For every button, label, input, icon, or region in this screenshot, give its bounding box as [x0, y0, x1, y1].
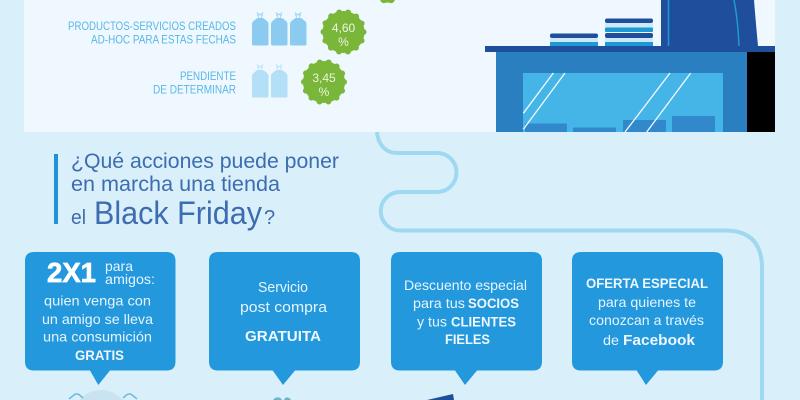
- illustration: shop counter: [485, 0, 775, 132]
- row: products and services created ad hoc: 4,60: [332, 21, 356, 35]
- shopping bag: [661, 0, 758, 46]
- speech bubble: facebook offer: conozcan a través: [589, 312, 704, 328]
- speech bubble: facebook offer: [572, 252, 723, 385]
- speech bubble: post purchase service: [209, 252, 360, 385]
- speech bubble: post purchase service: post compra: [240, 300, 328, 316]
- speech bubble: post purchase service: GRATUITA: [245, 329, 322, 345]
- speech bubble: 2x1: un amigo se lleva: [42, 311, 153, 327]
- folded clothes right: [605, 18, 653, 46]
- panel: survey results: [24, 0, 775, 132]
- speech bubble: special discount: Descuento especial: [404, 277, 527, 293]
- speech bubble: facebook offer: para quienes te: [598, 294, 696, 310]
- speech bubble: special discount: SOCIOS: [468, 295, 519, 311]
- heading: ¿Qué acciones puede poner: [71, 150, 339, 173]
- row: products and services created ad hoc: PRODUCTOS-SERVICIOS CREADOS: [68, 19, 236, 33]
- speech bubble: 2x1: GRATIS: [75, 347, 124, 363]
- speech bubble: special discount: FIELES: [445, 331, 490, 347]
- speech bubble: facebook offer: Facebook: [623, 332, 696, 349]
- shop window: [523, 73, 723, 132]
- speech bubble: 2x1: [25, 252, 176, 385]
- heading: [54, 150, 339, 231]
- heading: el: [71, 207, 86, 229]
- speech bubble: 2x1: para: [105, 258, 133, 274]
- speech bubble: special discount: y tus: [417, 314, 447, 330]
- icon: face with ears, cut off at the bottom: [69, 390, 137, 400]
- speech bubble: 2x1: una consumición: [43, 328, 152, 344]
- heading: ?: [264, 207, 275, 229]
- folded clothes left: [550, 34, 598, 46]
- speech bubble: special discount: [391, 252, 542, 385]
- winding path line: [377, 132, 762, 400]
- speech bubble: special discount: CLIENTES: [451, 314, 516, 330]
- speech bubble: special discount: para tus: [413, 295, 465, 311]
- speech bubble: 2x1: quien venga con: [44, 292, 151, 308]
- speech bubble: facebook offer: de: [603, 332, 619, 348]
- green badge cut off at top: [380, 0, 395, 3]
- speech bubble: facebook offer: OFERTA ESPECIAL: [586, 275, 708, 291]
- speech bubble: 2x1: 2X1: [47, 257, 96, 288]
- heading: en marcha una tienda: [71, 173, 280, 196]
- row: pending to determine: PENDIENTE: [180, 69, 236, 83]
- speech bubble: 2x1: amigos:: [105, 271, 155, 287]
- icon: teal shape, cut off at the bottom: [273, 397, 291, 400]
- row: pending to determine: [153, 61, 345, 103]
- speech bubble: post purchase service: Servicio: [258, 280, 308, 296]
- row: products and services created ad hoc: AD-HOC PARA ESTAS FECHAS: [91, 32, 236, 46]
- row: pending to determine: %: [319, 85, 330, 99]
- icon: dark blue shape, cut off at the bottom: [427, 394, 454, 400]
- row: products and services created ad hoc: %: [338, 35, 349, 49]
- row: products and services created ad hoc: [68, 11, 364, 53]
- heading: Black Friday: [94, 195, 262, 231]
- row: pending to determine: DE DETERMINAR: [153, 82, 236, 96]
- row: pending to determine: 3,45: [312, 71, 336, 85]
